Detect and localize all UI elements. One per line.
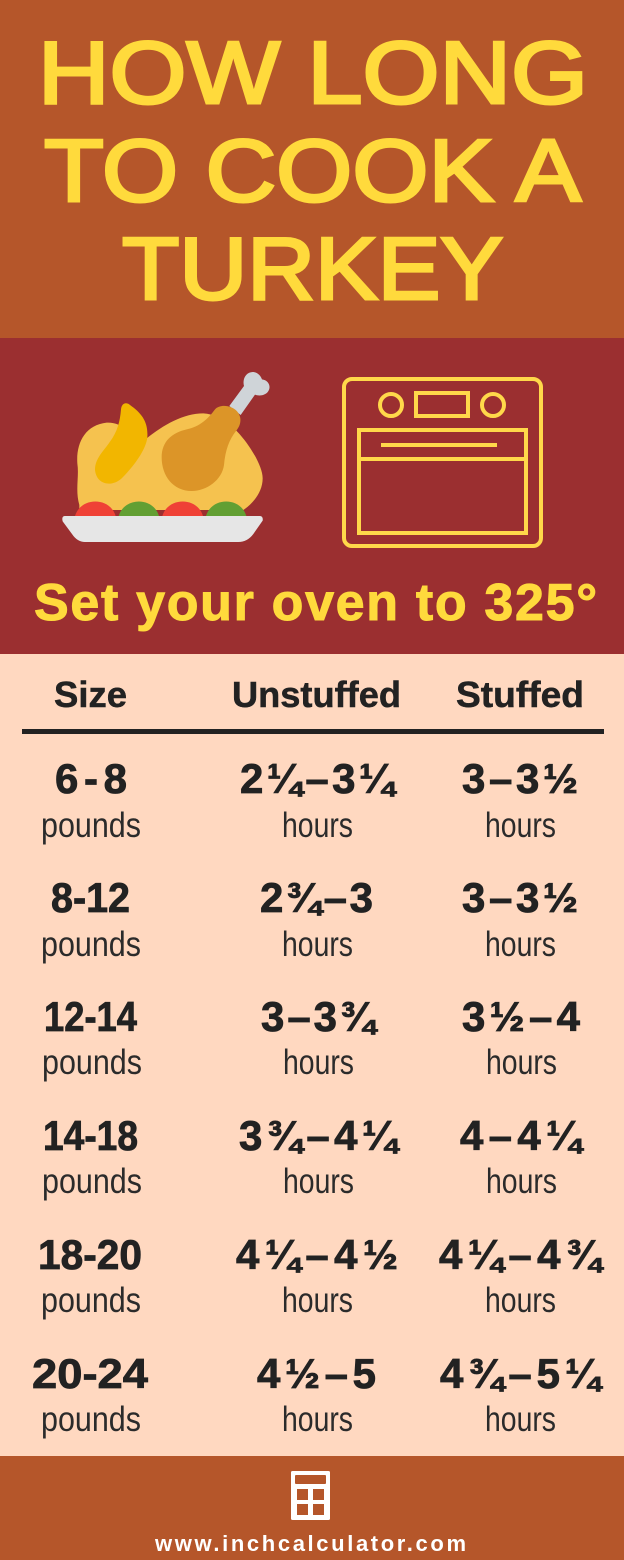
row: 20-24 pounds	[32, 1350, 603, 1439]
title	[38, 23, 588, 318]
oven temperature text: Set your oven to 325°	[34, 574, 597, 632]
row: 8-12 pounds: pounds	[41, 925, 141, 964]
row: 14-18 pounds: hours	[486, 1162, 557, 1201]
row: 12-14 pounds: pounds	[42, 1043, 142, 1082]
row: 6-8 pounds: 6-8	[55, 755, 127, 802]
row: 14-18 pounds: hours	[283, 1162, 354, 1201]
table header: Size	[54, 674, 127, 715]
title: TURKEY	[122, 219, 503, 318]
panel: footer	[0, 1456, 624, 1560]
row: 6-8 pounds: 2¼–3¼	[240, 755, 397, 802]
row: 12-14 pounds: 3–3¾	[261, 993, 378, 1040]
row: 20-24 pounds: 20-24	[32, 1350, 149, 1397]
row: 12-14 pounds: hours	[283, 1043, 354, 1082]
row: 14-18 pounds: pounds	[42, 1162, 142, 1201]
panel: oven temperature	[0, 338, 624, 654]
icon: calculator	[291, 1471, 330, 1520]
row: 12-14 pounds: hours	[486, 1043, 557, 1082]
row: 20-24 pounds: 4½–5	[257, 1350, 376, 1397]
row: 14-18 pounds: 4–4¼	[460, 1112, 584, 1159]
row: 6-8 pounds	[41, 755, 578, 845]
icon: oven	[344, 379, 541, 546]
table header: Unstuffed	[232, 674, 401, 715]
row: 6-8 pounds: 3–3½	[462, 755, 578, 802]
icon: roast turkey on platter	[62, 372, 270, 542]
row: 20-24 pounds: 4¾–5¼	[440, 1350, 603, 1397]
row: 6-8 pounds: pounds	[41, 806, 141, 845]
row: 6-8 pounds: hours	[485, 806, 556, 845]
row: 18-20 pounds	[38, 1231, 604, 1320]
website URL: www.inchcalculator.com	[154, 1531, 466, 1556]
title: HOW LONG	[38, 23, 588, 122]
row: 18-20 pounds: 4¼–4¾	[439, 1231, 604, 1278]
row: 18-20 pounds: 4¼–4½	[236, 1231, 398, 1278]
row: 14-18 pounds	[42, 1112, 584, 1201]
panel: title header	[0, 0, 624, 338]
table header: Stuffed	[456, 674, 584, 715]
row: 12-14 pounds: 3½–4	[462, 993, 581, 1040]
row: 18-20 pounds: hours	[282, 1281, 353, 1320]
row: 8-12 pounds: 8-12	[51, 874, 130, 921]
title: TO COOK A	[44, 121, 581, 220]
row: 18-20 pounds: hours	[485, 1281, 556, 1320]
row: 20-24 pounds: hours	[282, 1400, 353, 1439]
row: 18-20 pounds: 18-20	[38, 1231, 142, 1278]
row: 8-12 pounds: hours	[282, 925, 353, 964]
row: 12-14 pounds: 12-14	[44, 993, 138, 1040]
panel: cooking times table	[0, 654, 624, 1456]
row: 18-20 pounds: pounds	[41, 1281, 141, 1320]
row: 8-12 pounds: hours	[485, 925, 556, 964]
table header	[22, 674, 604, 734]
row: 8-12 pounds: 2¾–3	[260, 874, 373, 921]
row: 6-8 pounds: hours	[282, 806, 353, 845]
row: 12-14 pounds	[42, 993, 581, 1082]
row: 20-24 pounds: hours	[485, 1400, 556, 1439]
row: 14-18 pounds: 14-18	[43, 1112, 138, 1159]
row: 8-12 pounds	[41, 874, 578, 964]
row: 20-24 pounds: pounds	[41, 1400, 141, 1439]
row: 14-18 pounds: 3¾–4¼	[239, 1112, 400, 1159]
row: 8-12 pounds: 3–3½	[462, 874, 578, 921]
